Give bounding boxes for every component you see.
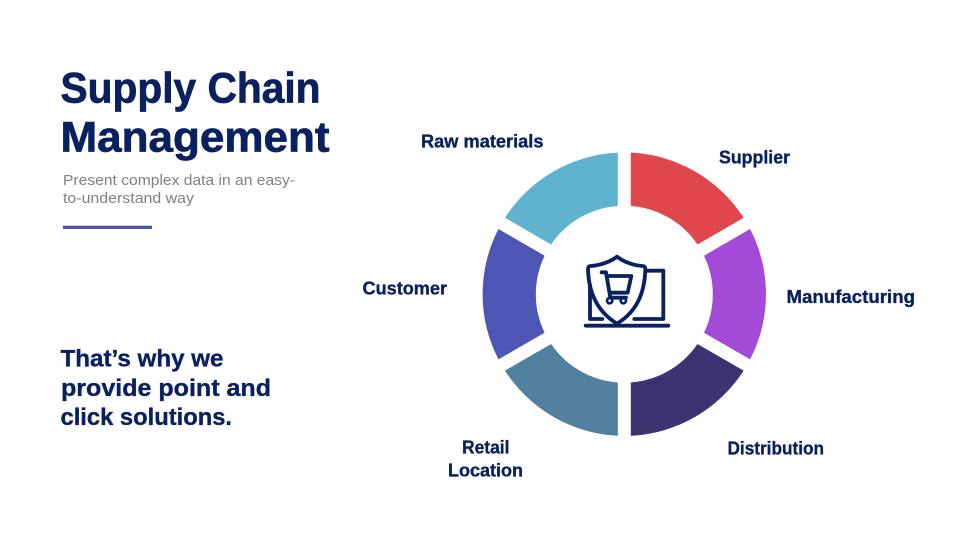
label: manufacturing: Manufacturing: [786, 287, 915, 307]
segment: raw materials: [505, 153, 618, 244]
segment: customer: [483, 229, 545, 359]
label: retail location: Retail: [462, 438, 510, 458]
statement text: click solutions.: [60, 404, 232, 431]
subtitle: Present complex data in an easy-: [63, 173, 295, 189]
donut chart: [483, 153, 766, 436]
label: distribution: Distribution: [728, 439, 824, 459]
statement text: provide point and: [61, 375, 271, 402]
statement text: [60, 346, 271, 431]
accent line: [63, 226, 152, 229]
label: customer: Customer: [362, 279, 447, 299]
label: retail location: [448, 438, 523, 480]
title: Supply Chain: [60, 66, 320, 113]
segment: distribution: [631, 344, 744, 436]
statement text: That’s why we: [60, 346, 224, 373]
subtitle: to-understand way: [63, 191, 195, 207]
label: raw materials: Raw materials: [421, 132, 544, 152]
title: Management: [60, 115, 330, 162]
title: [60, 66, 330, 162]
label: supplier: Supplier: [719, 147, 790, 167]
label: retail location: Location: [448, 460, 523, 480]
segment: supplier: [631, 153, 744, 244]
icon: shield, laptop and cart: [586, 257, 668, 326]
segment: manufacturing: [704, 229, 766, 359]
subtitle: [63, 173, 295, 207]
segment: retail location: [505, 344, 618, 436]
